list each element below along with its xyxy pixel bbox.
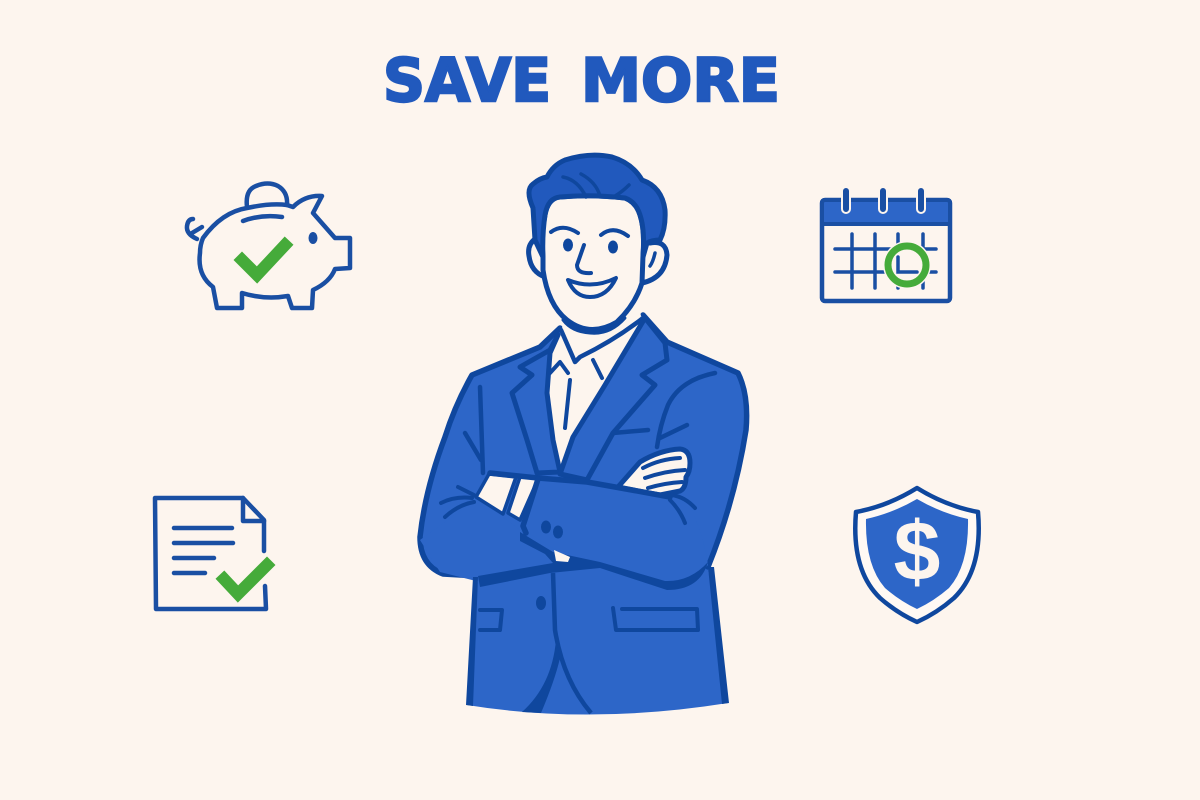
circle halo bbox=[883, 241, 931, 289]
lapel notch and jacket creases bbox=[465, 373, 715, 473]
ears bbox=[529, 239, 667, 283]
shirt collar bbox=[550, 318, 643, 428]
page fold bbox=[243, 498, 264, 521]
calendar rings bbox=[846, 191, 921, 209]
title: MORE bbox=[581, 46, 780, 116]
left hand cuffs bbox=[476, 474, 539, 520]
jacket button bbox=[536, 596, 546, 610]
back forearm fill bbox=[420, 498, 560, 582]
forearm outline bbox=[490, 473, 695, 533]
left lapel bbox=[512, 335, 560, 473]
front forearm bbox=[523, 479, 708, 583]
jacket vent wedge bbox=[522, 640, 560, 713]
green check bbox=[224, 565, 267, 594]
tail bbox=[187, 219, 202, 239]
right hand bbox=[618, 449, 690, 495]
calendar frame bbox=[822, 200, 950, 301]
jacket silhouette bbox=[418, 315, 748, 715]
L mark bbox=[898, 257, 917, 272]
nose bbox=[577, 245, 591, 273]
shield outer bbox=[855, 488, 979, 622]
shirt bbox=[547, 316, 648, 472]
hair bbox=[529, 155, 665, 257]
character: businessman with crossed arms bbox=[418, 155, 748, 715]
text lines bbox=[174, 528, 233, 573]
forearm shadow bbox=[478, 532, 708, 590]
coin slot bbox=[243, 216, 282, 221]
grid lines bbox=[835, 234, 936, 288]
sleeve buttons bbox=[541, 520, 563, 538]
face bbox=[542, 196, 644, 330]
jacket side edges bbox=[466, 567, 729, 706]
eyes bbox=[563, 238, 618, 254]
shirt gap bbox=[554, 550, 570, 562]
icon: shield with dollar bbox=[855, 488, 979, 622]
icon: piggy bank bbox=[187, 184, 350, 308]
hair strands bbox=[563, 174, 629, 197]
calendar ring centres bbox=[846, 191, 921, 209]
right lapel bbox=[560, 318, 667, 480]
green ring bbox=[888, 246, 926, 284]
calendar header bbox=[822, 200, 950, 224]
jacket front line bbox=[553, 573, 591, 713]
shield inner bbox=[866, 499, 968, 609]
mouth bbox=[568, 278, 616, 297]
right pocket bbox=[613, 608, 698, 630]
pig body bbox=[200, 196, 350, 308]
neck bbox=[562, 303, 641, 358]
pig eye bbox=[308, 232, 318, 244]
coin bbox=[247, 184, 287, 207]
title: SAVE bbox=[383, 46, 551, 116]
green check bbox=[242, 245, 285, 275]
icon: document with check bbox=[155, 498, 267, 609]
icon: calendar bbox=[822, 191, 950, 301]
dollar sign: $ bbox=[894, 504, 940, 598]
page outline bbox=[155, 498, 266, 609]
eyebrows bbox=[551, 228, 628, 236]
jacket outer outline bbox=[420, 315, 747, 576]
left pocket bbox=[480, 610, 502, 630]
chin shadow bbox=[563, 318, 625, 333]
sleeve creases left bbox=[441, 487, 474, 517]
